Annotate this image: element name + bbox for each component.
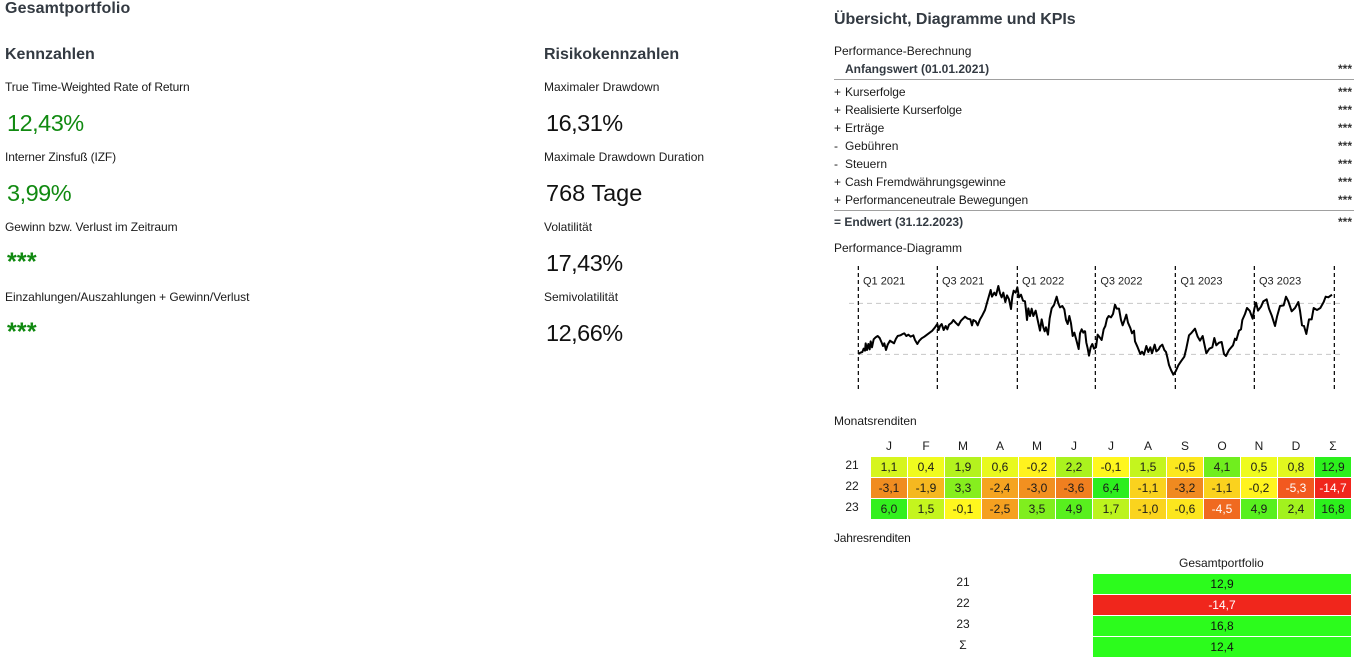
value: Endwert: ***	[1338, 215, 1352, 229]
row 2021: -0,5	[1175, 460, 1195, 474]
month headers: J	[886, 439, 892, 453]
value: hidden deposits: ***	[7, 318, 37, 346]
month headers	[886, 439, 1337, 453]
value: Performanceneutrale Bewegungen: ***	[1338, 193, 1352, 207]
row 2021	[845, 457, 1351, 477]
row: Steuern: Steuern	[845, 157, 887, 171]
bar total: 12,4	[1210, 640, 1234, 654]
subheading: Monatsrenditen: Monatsrenditen	[834, 414, 917, 428]
quarter labels: Q1 2022	[1022, 276, 1064, 288]
row 2021: 0,5	[1251, 460, 1267, 474]
value: Kurserfolge: ***	[1338, 85, 1352, 99]
column header: Gesamtportfolio	[1179, 556, 1264, 570]
row 2022: -1,1	[1138, 481, 1158, 495]
month headers: N	[1255, 439, 1263, 453]
row: Erträge: +	[834, 121, 841, 135]
month headers: M	[1032, 439, 1042, 453]
row: Performanceneutrale Bewegungen: +	[834, 193, 841, 207]
row 2023: 16,8	[1321, 502, 1345, 516]
subheading: Performance-Diagramm: Performance-Diagramm	[834, 241, 962, 255]
row 2022: -3,6	[1064, 481, 1084, 495]
month headers: F	[922, 439, 930, 453]
row 2022: -5,3	[1286, 481, 1306, 495]
row: Gebühren: Gebühren	[845, 139, 898, 153]
bar 22: -14,7	[1208, 598, 1236, 612]
row: Gebühren: -	[834, 139, 838, 153]
bar 21	[1093, 574, 1351, 594]
row 2023: 1,5	[918, 502, 934, 516]
performance line	[858, 286, 1332, 375]
row 2022: 22	[845, 479, 859, 493]
month headers: J	[1108, 439, 1114, 453]
row 2021: 21	[845, 458, 859, 472]
bar 23: 16,8	[1210, 619, 1234, 633]
month headers: O	[1217, 439, 1227, 453]
row 2023: -0,6	[1175, 502, 1195, 516]
quarter labels: Q3 2022	[1100, 276, 1143, 288]
heading: Risikokennzahlen: Risikokennzahlen	[544, 46, 679, 63]
subheading: Performance-Berechnung: Performance-Berechnung	[834, 44, 971, 58]
row 2021: 1,1	[881, 460, 897, 474]
row 2022	[845, 478, 1351, 498]
bar 23	[1093, 616, 1351, 636]
quarter labels: Q1 2021	[863, 276, 905, 288]
row 2021: 12,9	[1321, 460, 1345, 474]
line chart: performance	[849, 266, 1340, 389]
value: 16,31%: 16,31%	[546, 110, 623, 136]
row 2023: 4,9	[1251, 502, 1267, 516]
label: Einzahlungen/Auszahlungen: Einzahlungen/Auszahlungen + Gewinn/Verlust	[5, 290, 249, 304]
value: 768 Tage: 768 Tage	[546, 180, 642, 206]
label: Maximale Drawdown Duration: Maximale Drawdown Duration	[544, 150, 704, 164]
row: Cash Fremdwährungsgewinne: Cash Fremdwährungsgewinne	[845, 175, 1006, 189]
row 2021: 4,1	[1214, 460, 1230, 474]
bar 21: 12,9	[1210, 577, 1234, 591]
value: hidden gain: ***	[7, 248, 37, 276]
month headers: D	[1292, 439, 1300, 453]
row 2023: 1,7	[1103, 502, 1119, 516]
row: Kurserfolge: Kurserfolge	[845, 85, 906, 99]
row: Kurserfolge: +	[834, 85, 841, 99]
row 2022: -3,1	[879, 481, 899, 495]
row: Realisierte Kurserfolge: +	[834, 103, 841, 117]
row 2021: 1,5	[1140, 460, 1156, 474]
panel: Kennzahlen	[5, 46, 250, 346]
month headers: A	[1144, 439, 1152, 453]
row 2022: -14,7	[1319, 481, 1347, 495]
panel: Performance-Berechnung	[834, 44, 1354, 229]
total label: Σ	[959, 638, 967, 652]
row: Performanceneutrale Bewegungen: Performanceneutrale Bewegungen	[845, 193, 1028, 207]
row 2022: -3,0	[1027, 481, 1047, 495]
value: Gebühren: ***	[1338, 139, 1352, 153]
value: Steuern: ***	[1338, 157, 1352, 171]
row 2023: -1,0	[1138, 502, 1158, 516]
heading: Übersicht, Diagramme und KPIs: Übersicht, Diagramme und KPIs	[834, 11, 1076, 28]
year 23: 23	[956, 617, 970, 631]
value: Cash Fremdwährungsgewinne: ***	[1338, 175, 1352, 189]
row 2021: 0,4	[918, 460, 934, 474]
value: Erträge: ***	[1338, 121, 1352, 135]
table: Jahresrenditen	[956, 556, 1351, 657]
quarter labels: Q1 2023	[1180, 276, 1223, 288]
row 2023: 6,0	[881, 502, 897, 516]
label: IZF: Interner Zinsfuß (IZF)	[5, 150, 116, 164]
label: Volatilität: Volatilität	[544, 220, 592, 234]
row: Endwert: = Endwert (31.12.2023)	[834, 215, 963, 229]
quarter labels: Q3 2021	[942, 276, 984, 288]
row 2021: 2,2	[1066, 460, 1082, 474]
row 2021: 0,8	[1288, 460, 1304, 474]
label: Gewinn bzw. Verlust: Gewinn bzw. Verlust im Zeitraum	[5, 220, 178, 234]
row 2022: -3,2	[1175, 481, 1195, 495]
row 2021: 0,6	[992, 460, 1008, 474]
row 2022: -1,9	[916, 481, 936, 495]
value: 12,66%: 12,66%	[546, 320, 623, 346]
row 2023: -4,5	[1212, 502, 1232, 516]
row 2022: -2,4	[990, 481, 1010, 495]
bar total	[1093, 637, 1351, 657]
subheading: Jahresrenditen: Jahresrenditen	[834, 531, 911, 545]
row 2022: 3,3	[955, 481, 971, 495]
row 2022: -0,2	[1249, 481, 1269, 495]
label: Maximaler Drawdown: Maximaler Drawdown	[544, 80, 659, 94]
row: Realisierte Kurserfolge: Realisierte Kurserfolge	[845, 103, 962, 117]
month headers: S	[1181, 439, 1189, 453]
row 2021: -0,2	[1027, 460, 1047, 474]
row 2023	[845, 499, 1351, 519]
quarter labels	[863, 276, 1301, 288]
heading: Kennzahlen: Kennzahlen	[5, 46, 95, 63]
month headers: A	[996, 439, 1004, 453]
value: 3,99%: 3,99%	[7, 180, 71, 206]
year 21: 21	[956, 575, 970, 589]
label: Semivolatilität: Semivolatilität	[544, 290, 618, 304]
month headers: Σ	[1329, 439, 1337, 453]
row 2021: 1,9	[955, 460, 971, 474]
title: Gesamtportfolio: Gesamtportfolio	[5, 0, 130, 17]
heatmap: Monatsrenditen	[845, 439, 1351, 519]
value: Anfangswert: ***	[1338, 62, 1352, 76]
row 2023: 2,4	[1288, 502, 1304, 516]
bar 22	[1093, 595, 1351, 615]
row 2023: 23	[845, 500, 859, 514]
value: 12,43%: 12,43%	[7, 110, 84, 136]
year 22: 22	[956, 596, 970, 610]
value: Realisierte Kurserfolge: ***	[1338, 103, 1352, 117]
row 2021: -0,1	[1101, 460, 1121, 474]
row: Steuern: -	[834, 157, 838, 171]
row: Anfangswert: Anfangswert (01.01.2021)	[845, 62, 989, 76]
row 2022: 6,4	[1103, 481, 1119, 495]
row 2023: 3,5	[1029, 502, 1045, 516]
row 2023: -0,1	[953, 502, 973, 516]
row 2023: 4,9	[1066, 502, 1082, 516]
row: Erträge: Erträge	[845, 121, 884, 135]
value: 17,43%: 17,43%	[546, 250, 623, 276]
row 2022: -1,1	[1212, 481, 1232, 495]
month headers: J	[1071, 439, 1077, 453]
panel: Risikokennzahlen	[544, 46, 704, 346]
quarter labels: Q3 2023	[1259, 276, 1301, 288]
month headers: M	[958, 439, 968, 453]
label: TTWROR: True Time-Weighted Rate of Return	[5, 80, 189, 94]
row 2023: -2,5	[990, 502, 1010, 516]
row: Cash Fremdwährungsgewinne: +	[834, 175, 841, 189]
